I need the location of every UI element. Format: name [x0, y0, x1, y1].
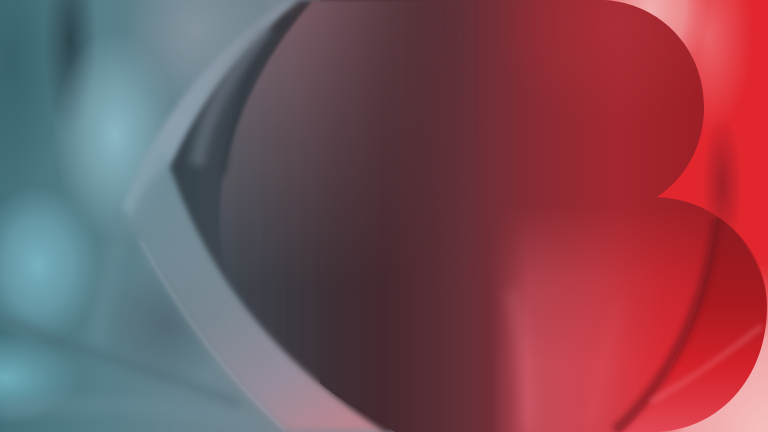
- lower red petal: [490, 205, 768, 432]
- petal light streaks: [512, 290, 620, 428]
- region outside the B: [600, 0, 768, 432]
- teal glows and shadows: [0, 0, 400, 432]
- mauve orb upper glow: [220, 0, 422, 248]
- red glow at top of B: [450, 0, 768, 200]
- right section of lower lobe: [615, 215, 768, 432]
- dark crease and orb: [170, 0, 768, 432]
- dark fold line: [615, 218, 716, 431]
- light diagonal crease: [650, 326, 762, 402]
- grey-mauve band below the orb: [125, 150, 395, 432]
- dark orb interior cover: [320, 0, 622, 432]
- pale ribbon sweeping up: [122, 2, 300, 219]
- dark edge of the orb: [224, 15, 290, 175]
- lighter streak inside crease: [197, 28, 268, 165]
- thin highlight on the band: [140, 240, 285, 430]
- soft streaks in the teal field: [2, 222, 260, 426]
